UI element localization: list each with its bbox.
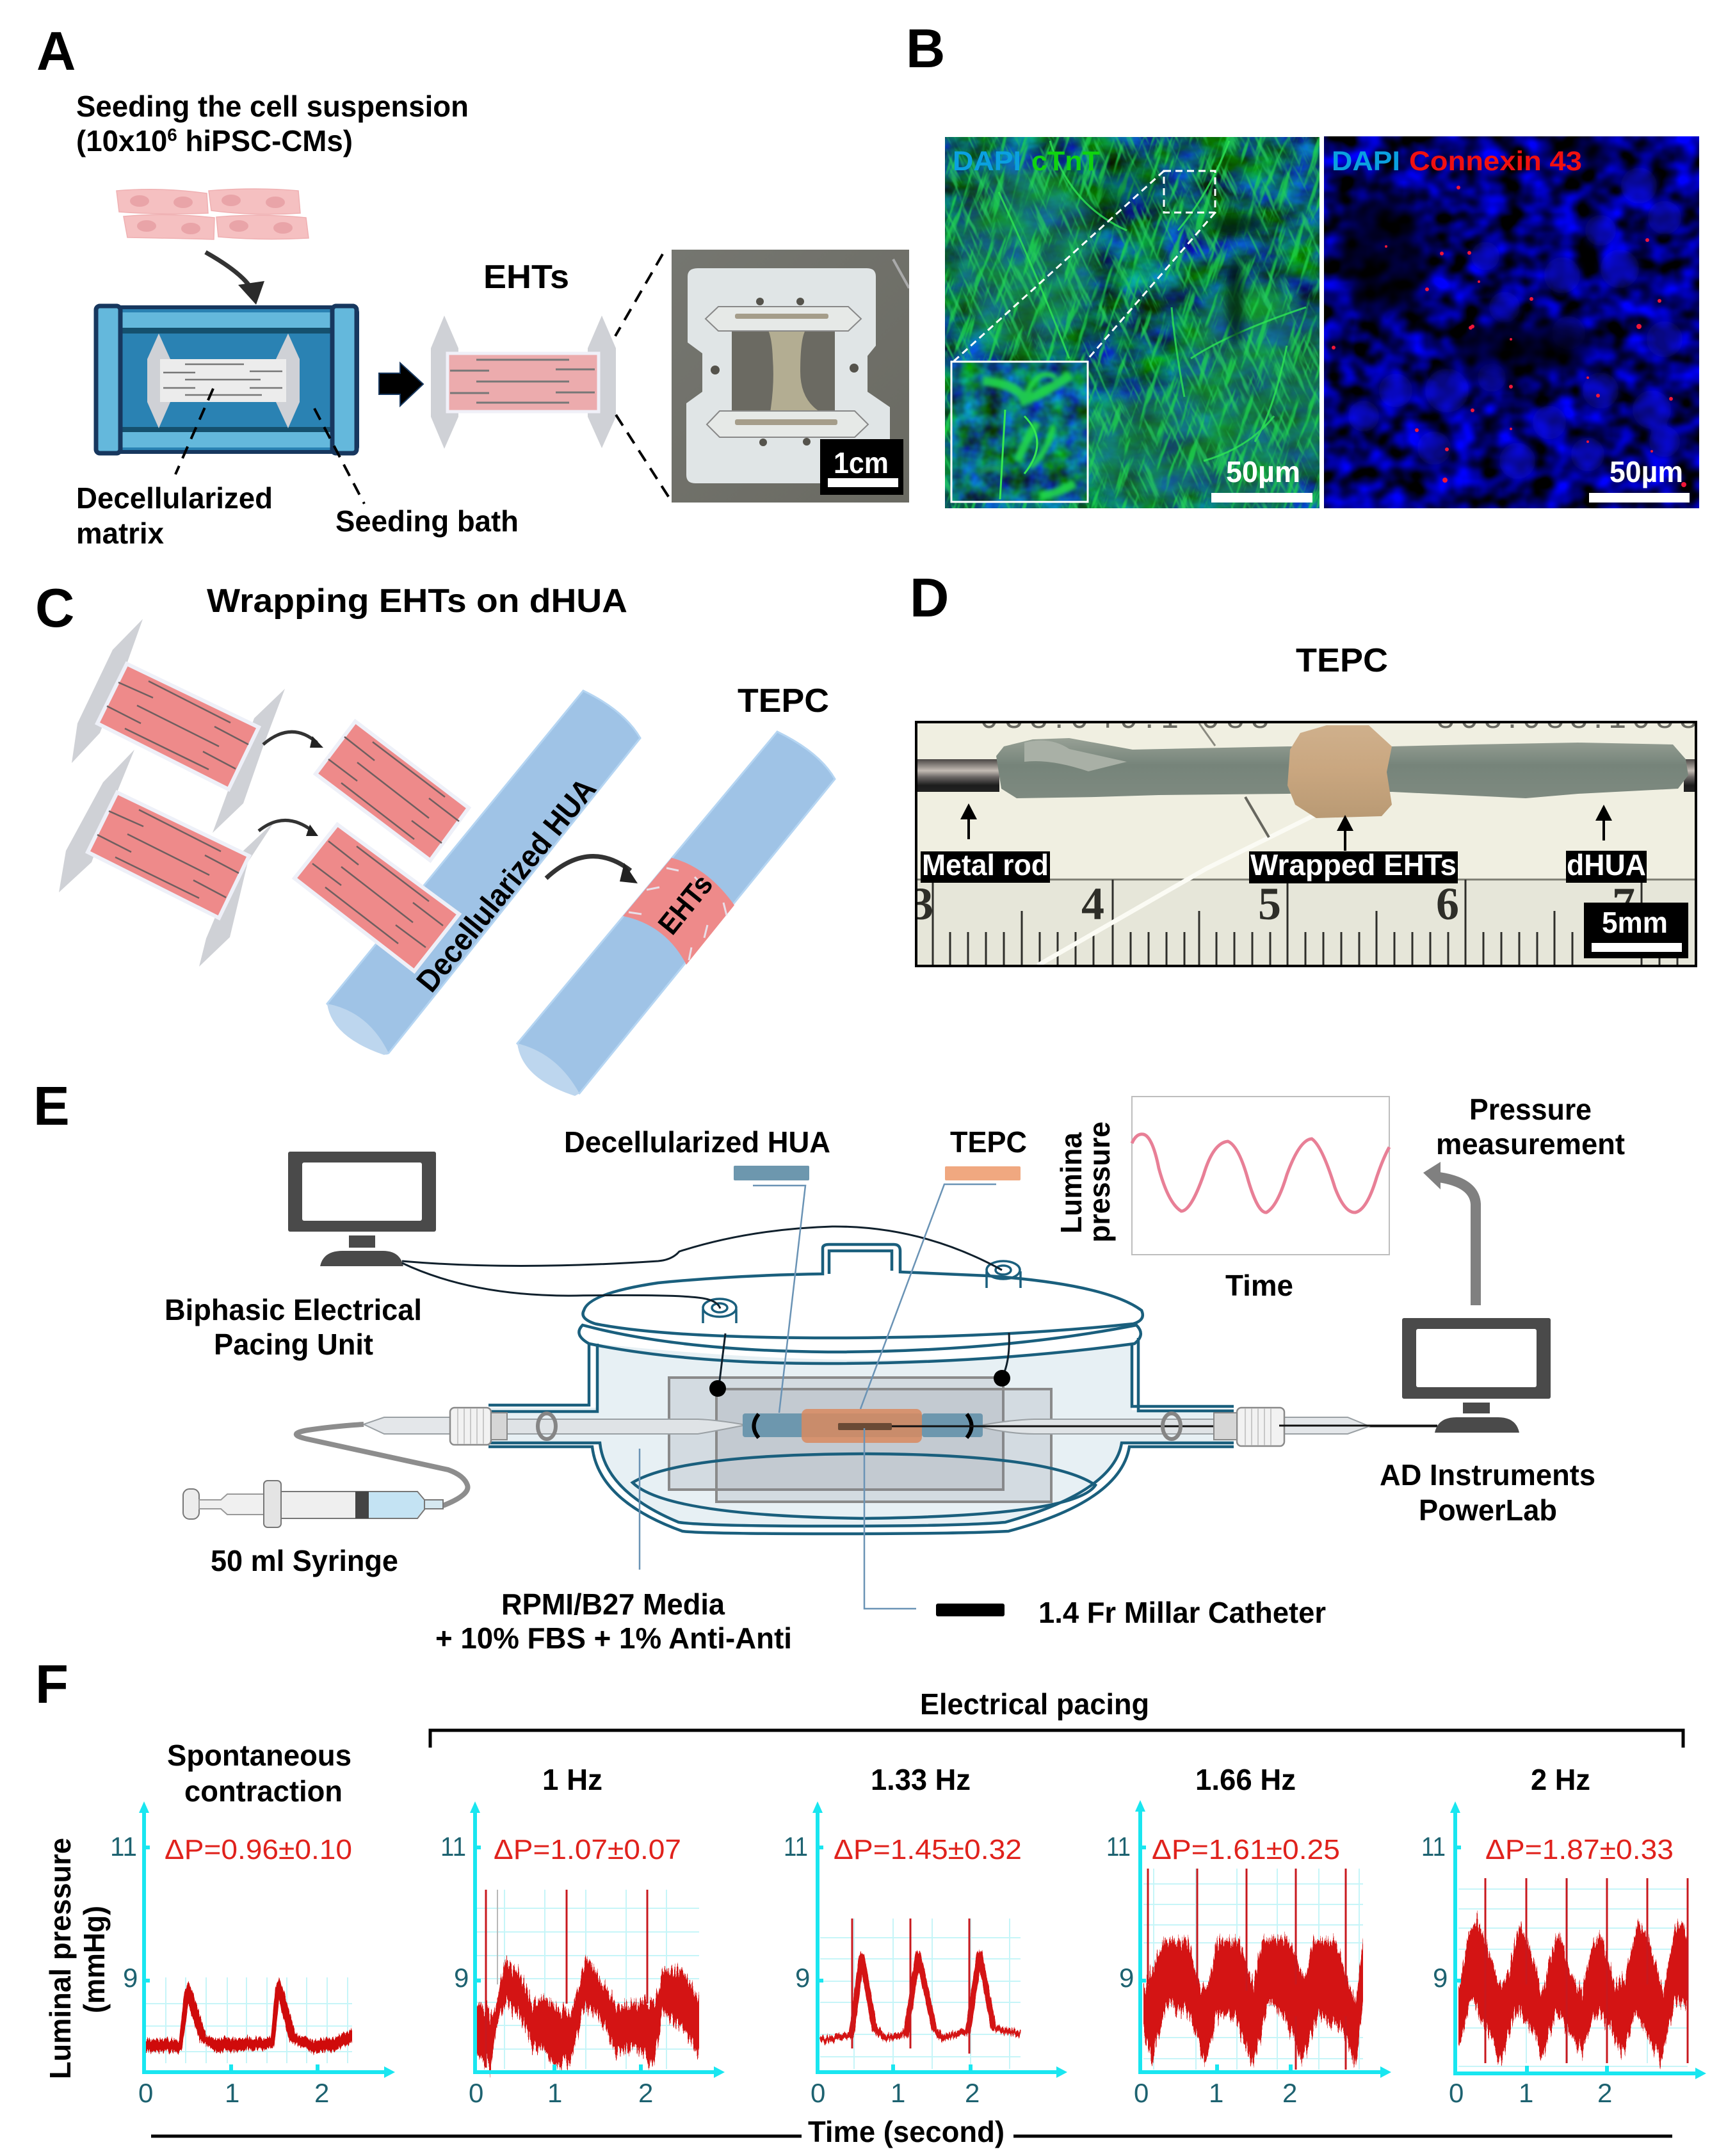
label and key: decellularized HUA (564, 1125, 830, 1413)
chart: 1.33 Hz: 9 (795, 1963, 810, 1993)
photo with ruler: 6 (1436, 878, 1459, 929)
chart: 2 Hz: 2 (1597, 2078, 1612, 2108)
panel A: seeding of engineered heart tissue (36, 21, 909, 550)
arrows and labels: dHUA (1567, 848, 1646, 881)
chart: 1.66 Hz (1106, 1763, 1391, 2108)
chart: 1 Hz: 0 (469, 2078, 483, 2108)
panel E: bioreactor setup (33, 1076, 1625, 1655)
TEPC tube with wrapped band (517, 732, 835, 1096)
EHT on posts, upper (72, 619, 285, 833)
photo with ruler: 4 (1081, 878, 1104, 929)
panel F: luminal pressure traces (35, 1654, 1706, 2148)
icon: cardiomyocyte cells (117, 189, 309, 239)
label: decellularized matrix: matrix (76, 517, 164, 550)
photo with ruler: 5 (1258, 878, 1281, 929)
label: PowerLab: PowerLab (1419, 1493, 1557, 1527)
left monitor: pacing unit (288, 1152, 436, 1266)
chart: spontaneous contraction: 1 (225, 2078, 239, 2108)
label: pacing unit (165, 1293, 422, 1361)
chart: 1.66 Hz: 9 (1119, 1963, 1134, 1993)
chart: 2 Hz: 0 (1449, 2078, 1464, 2108)
heading: seeding the cell suspension: Seeding the cell suspension (76, 90, 469, 123)
panel letter D: D (910, 568, 949, 629)
label and key: TEPC (860, 1125, 1027, 1409)
stain labels: DAPI (1332, 146, 1400, 177)
photo with ruler: 7 (1612, 878, 1635, 929)
label: media (435, 1449, 792, 1655)
label: catheter (864, 1428, 1326, 1629)
chart axis labels (1054, 1122, 1293, 1302)
photo with ruler: 808.088.1088 (1437, 699, 1697, 735)
arrows and labels: Metal rod (922, 848, 1049, 881)
scale bar 5 mm: 5mm (1602, 906, 1668, 939)
chart: 1.33 Hz: 11 (784, 1831, 808, 1862)
stain labels (953, 146, 1100, 177)
chart: 1 Hz: 11 (440, 1831, 466, 1862)
panel letter C: C (35, 578, 74, 639)
arrow: to pressure measurement (1423, 1162, 1476, 1305)
label: seeding bath: Seeding bath (335, 504, 519, 538)
chart: 1.33 Hz: 0 (811, 2078, 825, 2108)
chart axis labels: Time (1225, 1269, 1293, 1302)
tube label: Decellularized HUA (410, 772, 603, 999)
scale bar 5 mm (1584, 903, 1688, 958)
micrograph: DAPI cTnT (791, 0, 1473, 663)
micrograph: DAPI Connexin 43 (1324, 136, 1699, 508)
scale bar 50 µm (1589, 455, 1690, 503)
photo with ruler: 3 (910, 878, 933, 929)
chart: 1.33 Hz: 1 (891, 2078, 905, 2108)
x axis title with rule: Time (second) (808, 2115, 1005, 2148)
heading: seeding the cell suspension: hiPSC-CMs) (177, 124, 353, 157)
heading: electrical pacing with bracket (430, 1687, 1683, 1748)
chart: 1 Hz: 9 (454, 1963, 469, 1993)
syringe and tubing (183, 1424, 468, 1527)
arrows and labels (921, 803, 1647, 883)
chart axis labels: Lumina (1054, 1132, 1088, 1234)
bioreactor vessel (488, 1244, 1234, 1534)
y axis title: Luminal pressure (44, 1838, 77, 2079)
seeding bath device (96, 306, 357, 453)
chart: spontaneous contraction: ΔP=0.96±0.10 (165, 1834, 352, 1865)
stain labels: DAPI (953, 146, 1021, 177)
panel B: immunofluorescence images (791, 0, 1699, 663)
stain labels: cTnT (1031, 146, 1100, 177)
label: pressure measurement: Pressure (1469, 1093, 1592, 1126)
panel letter F: F (35, 1654, 69, 1715)
scale bar 50 µm: 50µm (1226, 455, 1300, 488)
band label: EHTs (651, 868, 719, 940)
transfer arrows (259, 732, 638, 883)
panel C: wrapping EHTs on dHUA (35, 578, 835, 1096)
panel letter B: B (906, 19, 945, 79)
arrows and labels: Wrapped EHTs (1250, 848, 1457, 881)
lid (583, 1244, 1143, 1338)
label: pressure measurement (1436, 1093, 1625, 1161)
label: PowerLab: AD Instruments (1380, 1458, 1595, 1492)
heading: Wrapping EHTs on dHUA (207, 583, 627, 620)
label: pacing unit: Biphasic Electrical (165, 1293, 422, 1326)
chart: 1.66 Hz: 1.66 Hz (1195, 1763, 1296, 1796)
detached EHT strips (295, 721, 469, 971)
arrow: cells into bath (206, 252, 264, 305)
chart: 2 Hz: 1 (1519, 2078, 1533, 2108)
chart: 1 Hz: ΔP=1.07±0.07 (494, 1834, 681, 1865)
chart: 1.33 Hz: 1.33 Hz (871, 1763, 971, 1796)
chart: 1 Hz: 1 Hz (542, 1763, 602, 1796)
chart title (167, 1739, 351, 1808)
label: syringe: 50 ml Syringe (211, 1544, 398, 1577)
heading TEPC: TEPC (1296, 642, 1388, 679)
panel letter A: A (36, 21, 76, 82)
chart: spontaneous contraction: 2 (314, 2078, 329, 2108)
stain labels (1332, 146, 1582, 177)
panel D: TEPC photograph (910, 568, 1697, 967)
chart: 1.66 Hz: ΔP=1.61±0.25 (1152, 1834, 1340, 1865)
chart: 1.66 Hz: 11 (1106, 1831, 1131, 1862)
chart: 1.66 Hz: 0 (1134, 2078, 1149, 2108)
scale bar 50 µm: 50µm (1610, 455, 1683, 488)
chart axis labels: pressure (1083, 1122, 1116, 1243)
chart: 2 Hz (1421, 1763, 1706, 2108)
chart: 1.33 Hz (784, 1763, 1067, 2108)
inset (951, 362, 1088, 502)
label: pressure measurement: measurement (1436, 1127, 1625, 1161)
lid ports (703, 1261, 1021, 1323)
block arrow (379, 363, 423, 406)
heading: seeding the cell suspension (76, 90, 469, 157)
chart title: contraction (184, 1774, 343, 1808)
photo: EHT frame with scale bar (672, 250, 909, 503)
chart: 1.66 Hz: 1 (1209, 2078, 1223, 2108)
chart: spontaneous contraction (110, 1739, 395, 2108)
photo: EHT frame with scale bar: 1cm (834, 446, 889, 479)
chart: 2 Hz: 11 (1421, 1831, 1446, 1862)
stain labels: Connexin 43 (1409, 146, 1582, 177)
chart title: Spontaneous (167, 1739, 351, 1772)
heading: seeding the cell suspension: (10x10 (76, 124, 168, 157)
catheter and vessel glass tubing (364, 1408, 1437, 1446)
y axis title: (mmHg) (77, 1906, 111, 2013)
chart: 2 Hz: ΔP=1.87±0.33 (1485, 1834, 1674, 1865)
label EHTs: EHTs (483, 259, 569, 296)
chart: 1.33 Hz: 2 (965, 2078, 980, 2108)
label and key: TEPC: TEPC (950, 1125, 1027, 1159)
zoom dashed lines and callout leaders (175, 254, 672, 504)
y axis title (44, 1838, 111, 2079)
decellularized HUA tube (327, 691, 640, 1055)
chart: 1.66 Hz: 2 (1282, 2078, 1297, 2108)
label: PowerLab (1380, 1458, 1595, 1527)
heading: electrical pacing with bracket: Electrical pacing (920, 1687, 1149, 1721)
chart: 1 Hz: 1 (547, 2078, 562, 2108)
photo with ruler: 038.049.1 088 (980, 699, 1269, 735)
label: catheter: 1.4 Fr Millar Catheter (1038, 1596, 1326, 1629)
chart: spontaneous contraction: 9 (123, 1963, 138, 1993)
chart: spontaneous contraction: 0 (138, 2078, 153, 2108)
chart: 1.33 Hz: ΔP=1.45±0.32 (834, 1834, 1022, 1865)
label: media: RPMI/B27 Media (501, 1588, 725, 1621)
scale bar 50 µm (1211, 455, 1312, 503)
label and key: decellularized HUA: Decellularized HUA (564, 1125, 830, 1159)
label: decellularized matrix: Decellularized (76, 481, 273, 515)
label: media: + 10% FBS + 1% Anti-Anti (435, 1621, 792, 1655)
region of interest (954, 171, 1215, 361)
label: decellularized matrix (76, 481, 273, 550)
chart: 1 Hz: 2 (638, 2078, 653, 2108)
label TEPC: TEPC (738, 682, 829, 720)
EHT on posts, lower (59, 750, 275, 967)
EHT on posts (431, 316, 616, 449)
heading: seeding the cell suspension: 6 (167, 125, 177, 145)
pressure chart (1054, 1097, 1389, 1302)
chart: 2 Hz: 9 (1433, 1963, 1448, 1993)
right monitor: PowerLab (1402, 1318, 1551, 1433)
panel letter E: E (33, 1076, 70, 1137)
chart: spontaneous contraction: 11 (110, 1831, 137, 1862)
label: pacing unit: Pacing Unit (214, 1328, 373, 1361)
chart: 1 Hz (440, 1763, 725, 2108)
chart: 2 Hz: 2 Hz (1531, 1763, 1590, 1796)
photo with ruler (910, 699, 1697, 967)
pacing wires (402, 1227, 1010, 1397)
